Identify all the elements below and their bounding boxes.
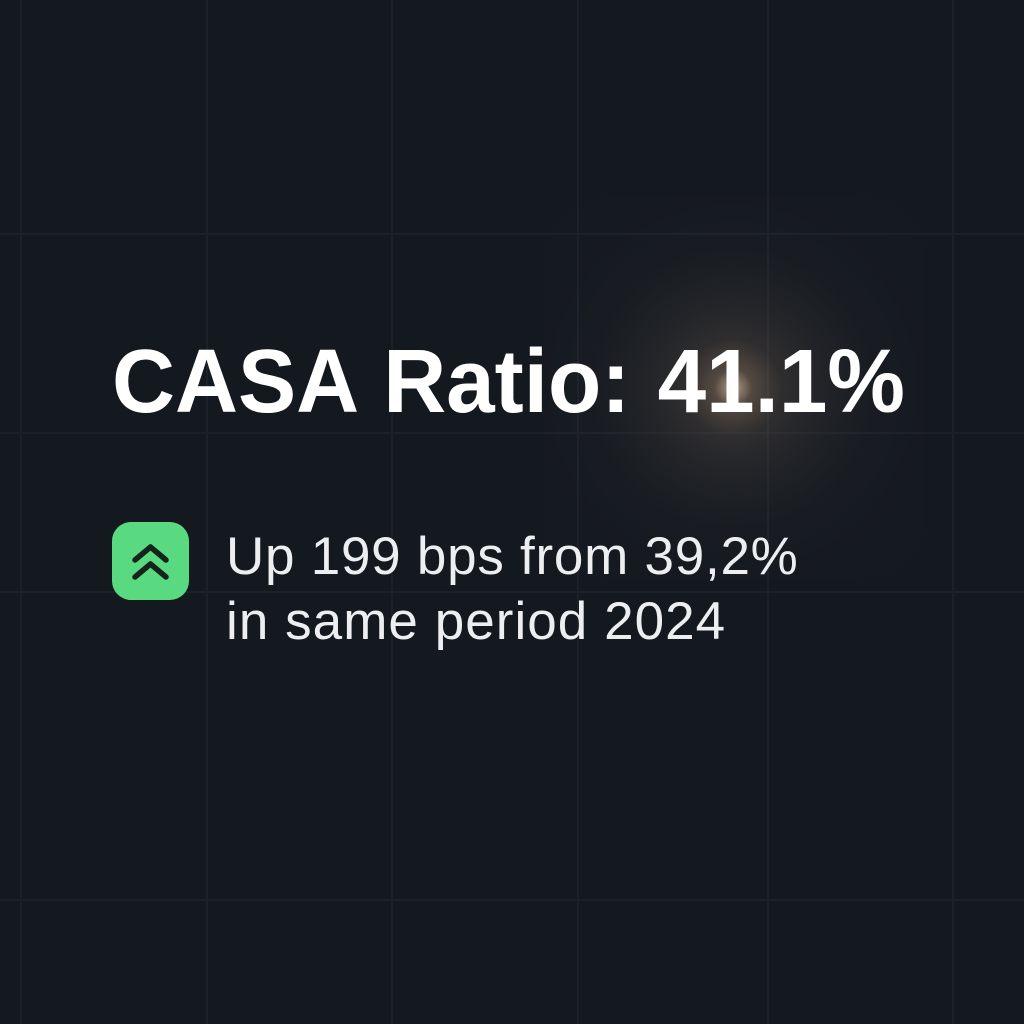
icon: green double chevron up [112,522,189,600]
subtitle text: Up 199 bps from 39,2% [226,527,799,586]
lens glow [543,198,923,578]
subtitle text [226,527,799,651]
subtitle text: in same period 2024 [226,592,726,651]
title: CASA Ratio: 41.1% [112,332,905,432]
